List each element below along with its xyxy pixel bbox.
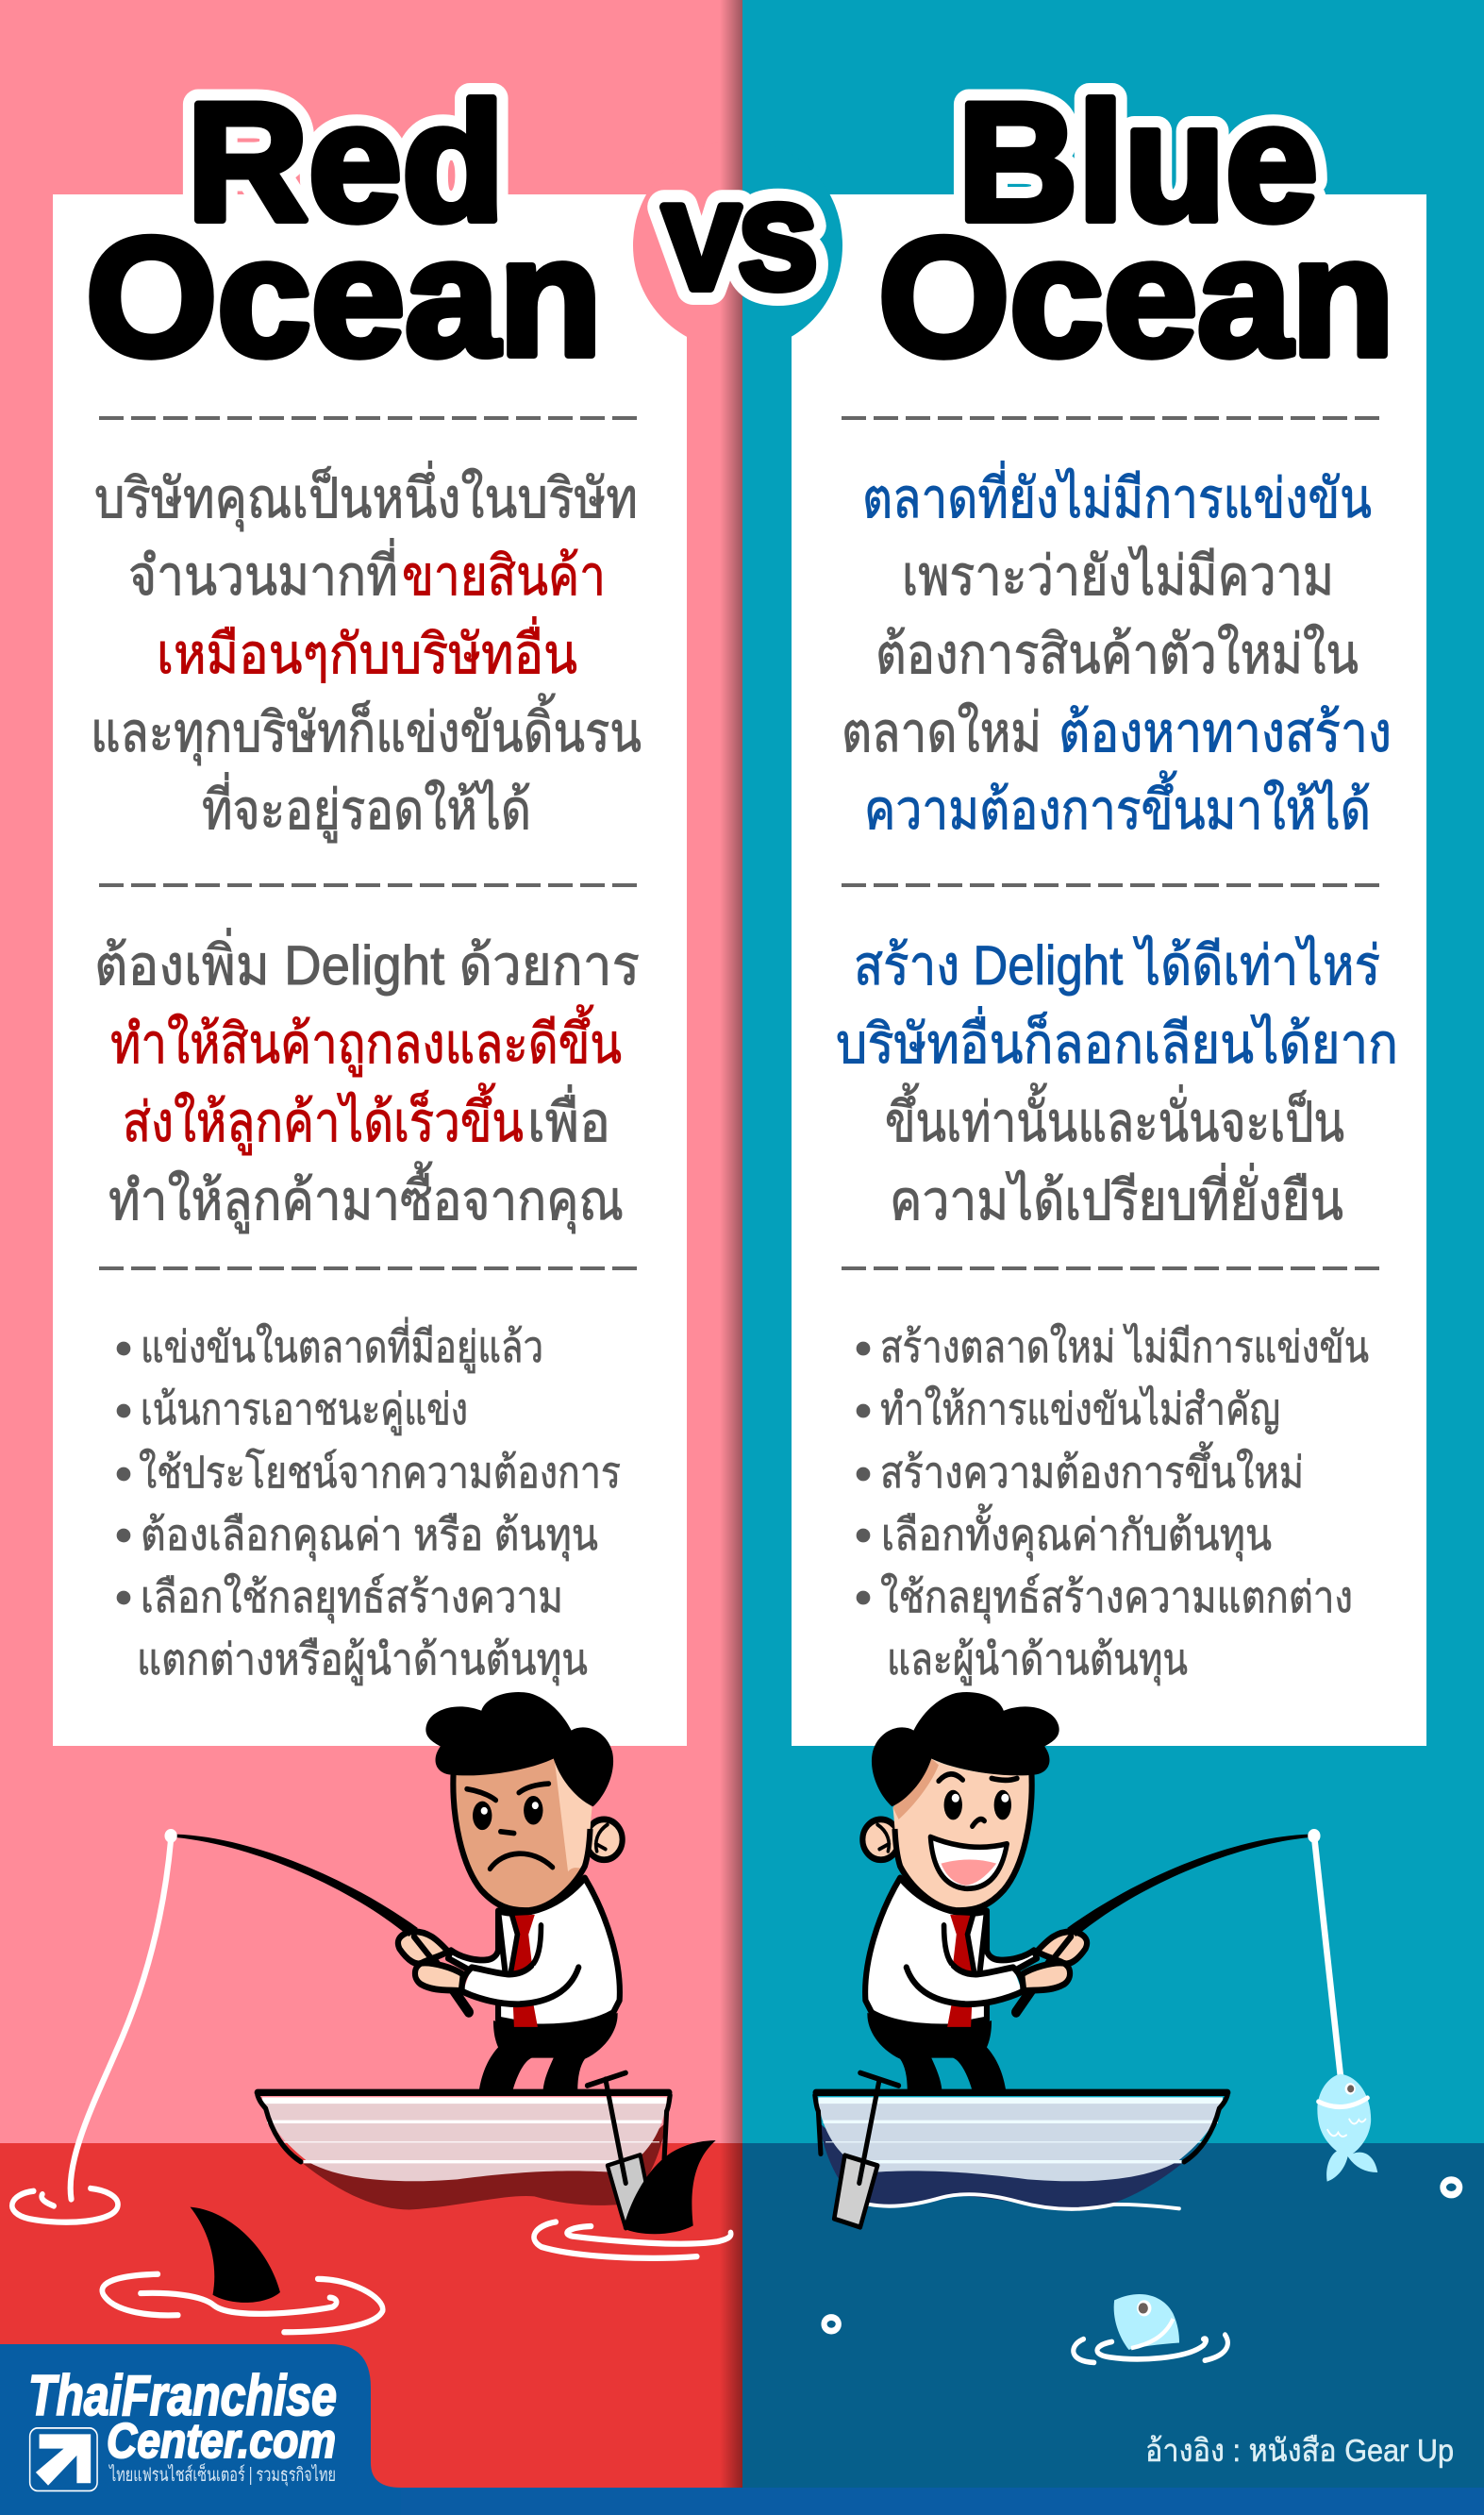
text block: red ocean description: บริษัทคุณเป็นหนึ่งในบริษัท [94, 461, 638, 532]
logo: ThaiFranchise Center.com: ไทยแฟรนไชส์เซ็นเตอร์ | รวมธุรกิจไทย [108, 2462, 336, 2487]
title: Blue Ocean: Blue [958, 68, 1318, 256]
list: red ocean bullets: ต้องเลือกคุณค่า หรือ ต้นทุน [141, 1510, 598, 1562]
bottom band [0, 2488, 1484, 2515]
logo arrow icon [30, 2428, 97, 2490]
text block: red ocean description: ที่จะอยู่รอดให้ได้ [202, 772, 531, 843]
text block: blue ocean delight: สร้าง Delight ได้ดีเท่าไหร่ [854, 934, 1380, 997]
text block: blue ocean delight: บริษัทอื่นก็ลอกเลียนได้ยาก [836, 1006, 1398, 1075]
dividers [99, 418, 1380, 1268]
text block: blue ocean description: ต้องหาทางสร้าง [1059, 702, 1392, 763]
list: red ocean bullets: แข่งขันในตลาดที่มีอยู่แล้ว [141, 1316, 543, 1373]
text block: red ocean description [91, 461, 642, 843]
text block: blue ocean description: ต้องการสินค้าตัวใหม่ใน [875, 623, 1359, 685]
title: Red Ocean: Ocean [86, 203, 602, 391]
credit: อ้างอิง : หนังสือ Gear Up [1145, 2433, 1454, 2468]
text block: red ocean description: ขายสินค้า [402, 545, 606, 607]
vs circle: red gap fill [736, 141, 742, 350]
title: Blue Ocean: Ocean [878, 203, 1394, 391]
background: blue side [742, 0, 1484, 2143]
red sea [0, 2143, 742, 2488]
text block: red ocean delight: ต้องเพิ่ม Delight ด้วยการ [94, 928, 640, 997]
list: red ocean bullets: เน้นการเอาชนะคู่แข่ง [141, 1384, 468, 1435]
boat [815, 2092, 1227, 2209]
panel: red ocean card [53, 194, 687, 1746]
illustration: red side fisherman scene [12, 1692, 731, 2332]
text block: red ocean delight: ทำให้สินค้าถูกลงและดีขึ้น [110, 1005, 622, 1077]
background: red side [0, 0, 742, 2143]
oar [834, 2072, 899, 2227]
oar [587, 2072, 646, 2228]
panel: blue ocean card [792, 194, 1426, 1746]
list: blue ocean bullets: สร้างความต้องการขึ้นใหม่ [880, 1441, 1304, 1497]
fish in water [1114, 2294, 1179, 2350]
vs circle: red half [633, 141, 738, 350]
list: blue ocean bullets: ใช้กลยุทธ์สร้างความแตกต่าง [880, 1572, 1353, 1624]
list: blue ocean bullets: ทำให้การแข่งขันไม่สำคัญ [880, 1384, 1280, 1434]
happy fisherman [862, 1692, 1321, 2091]
shark fin left [191, 2207, 280, 2303]
logo: ThaiFranchise Center.com: Center.com [107, 2414, 336, 2469]
list: blue ocean bullets [857, 1322, 1369, 1686]
title: Red Ocean [86, 68, 602, 391]
title: Red Ocean: Red [187, 68, 505, 256]
text block: blue ocean delight: ความได้เปรียบที่ยั่งยืน [890, 1163, 1343, 1232]
illustration: blue side fisherman scene [815, 1692, 1459, 2362]
logo: ThaiFranchise Center.com [0, 2344, 401, 2515]
list: red ocean bullets: แตกต่างหรือผู้นำด้านต้นทุน [137, 1635, 588, 1686]
text block: red ocean delight: ส่งให้ลูกค้าได้เร็วขึ้น [123, 1083, 524, 1155]
title: Blue Ocean [878, 68, 1394, 391]
boat [258, 2092, 670, 2209]
logo: ThaiFranchise Center.com: ThaiFranchise [28, 2364, 337, 2427]
blue sea [742, 2143, 1484, 2488]
fish on hook [1317, 2074, 1377, 2182]
list: red ocean bullets: ใช้ประโยชน์จากความต้องการ [139, 1448, 621, 1497]
title: Blue Ocean: Blue [958, 68, 1318, 256]
title: Red Ocean: Red [187, 68, 505, 256]
list: red ocean bullets: เลือกใช้กลยุทธ์สร้างความ [141, 1572, 563, 1624]
centre shadow [720, 0, 742, 2488]
text block: red ocean description: และทุกบริษัทก็แข่งขันดิ้นรน [91, 694, 642, 766]
text block: blue ocean delight: ขึ้นเท่านั้นและนั่นจะเป็น [885, 1083, 1344, 1153]
text block: blue ocean description: เพราะว่ายังไม่มีความ [902, 545, 1334, 607]
fishing line [71, 1839, 171, 2199]
vs circle: blue half [742, 141, 842, 350]
text block: red ocean description: เหมือนๆกับบริษัทอื่น [157, 616, 577, 685]
water ripples [12, 2188, 731, 2332]
list: blue ocean bullets: เลือกทั้งคุณค่ากับต้นทุน [881, 1503, 1272, 1562]
vs badge: VS [663, 183, 816, 313]
shark fin right [624, 2140, 716, 2234]
vs badge: VS [663, 183, 816, 313]
fishing line [1314, 1839, 1341, 2076]
angry fisherman [164, 1692, 623, 2091]
text block: blue ocean delight [836, 934, 1398, 1232]
text block: blue ocean description [842, 461, 1392, 841]
list: red ocean bullets [117, 1316, 621, 1686]
ripples and bubbles [825, 2180, 1459, 2362]
list: blue ocean bullets: และผู้นำด้านต้นทุน [887, 1635, 1188, 1686]
text block: red ocean delight: เพื่อ [527, 1084, 610, 1153]
text block: red ocean delight: ทำให้ลูกค้ามาซื้อจากคุณ [108, 1162, 624, 1234]
text block: blue ocean description: ตลาดที่ยังไม่มีการแข่งขัน [862, 461, 1372, 529]
list: blue ocean bullets: สร้างตลาดใหม่ ไม่มีการแข่งขัน [880, 1322, 1369, 1371]
text block: red ocean delight [94, 928, 640, 1234]
text block: blue ocean description: ความต้องการขึ้นมาให้ได้ [864, 771, 1371, 841]
text block: blue ocean description: ตลาดใหม่ [842, 701, 1042, 763]
text block: red ocean description: จำนวนมากที่ [128, 538, 398, 607]
